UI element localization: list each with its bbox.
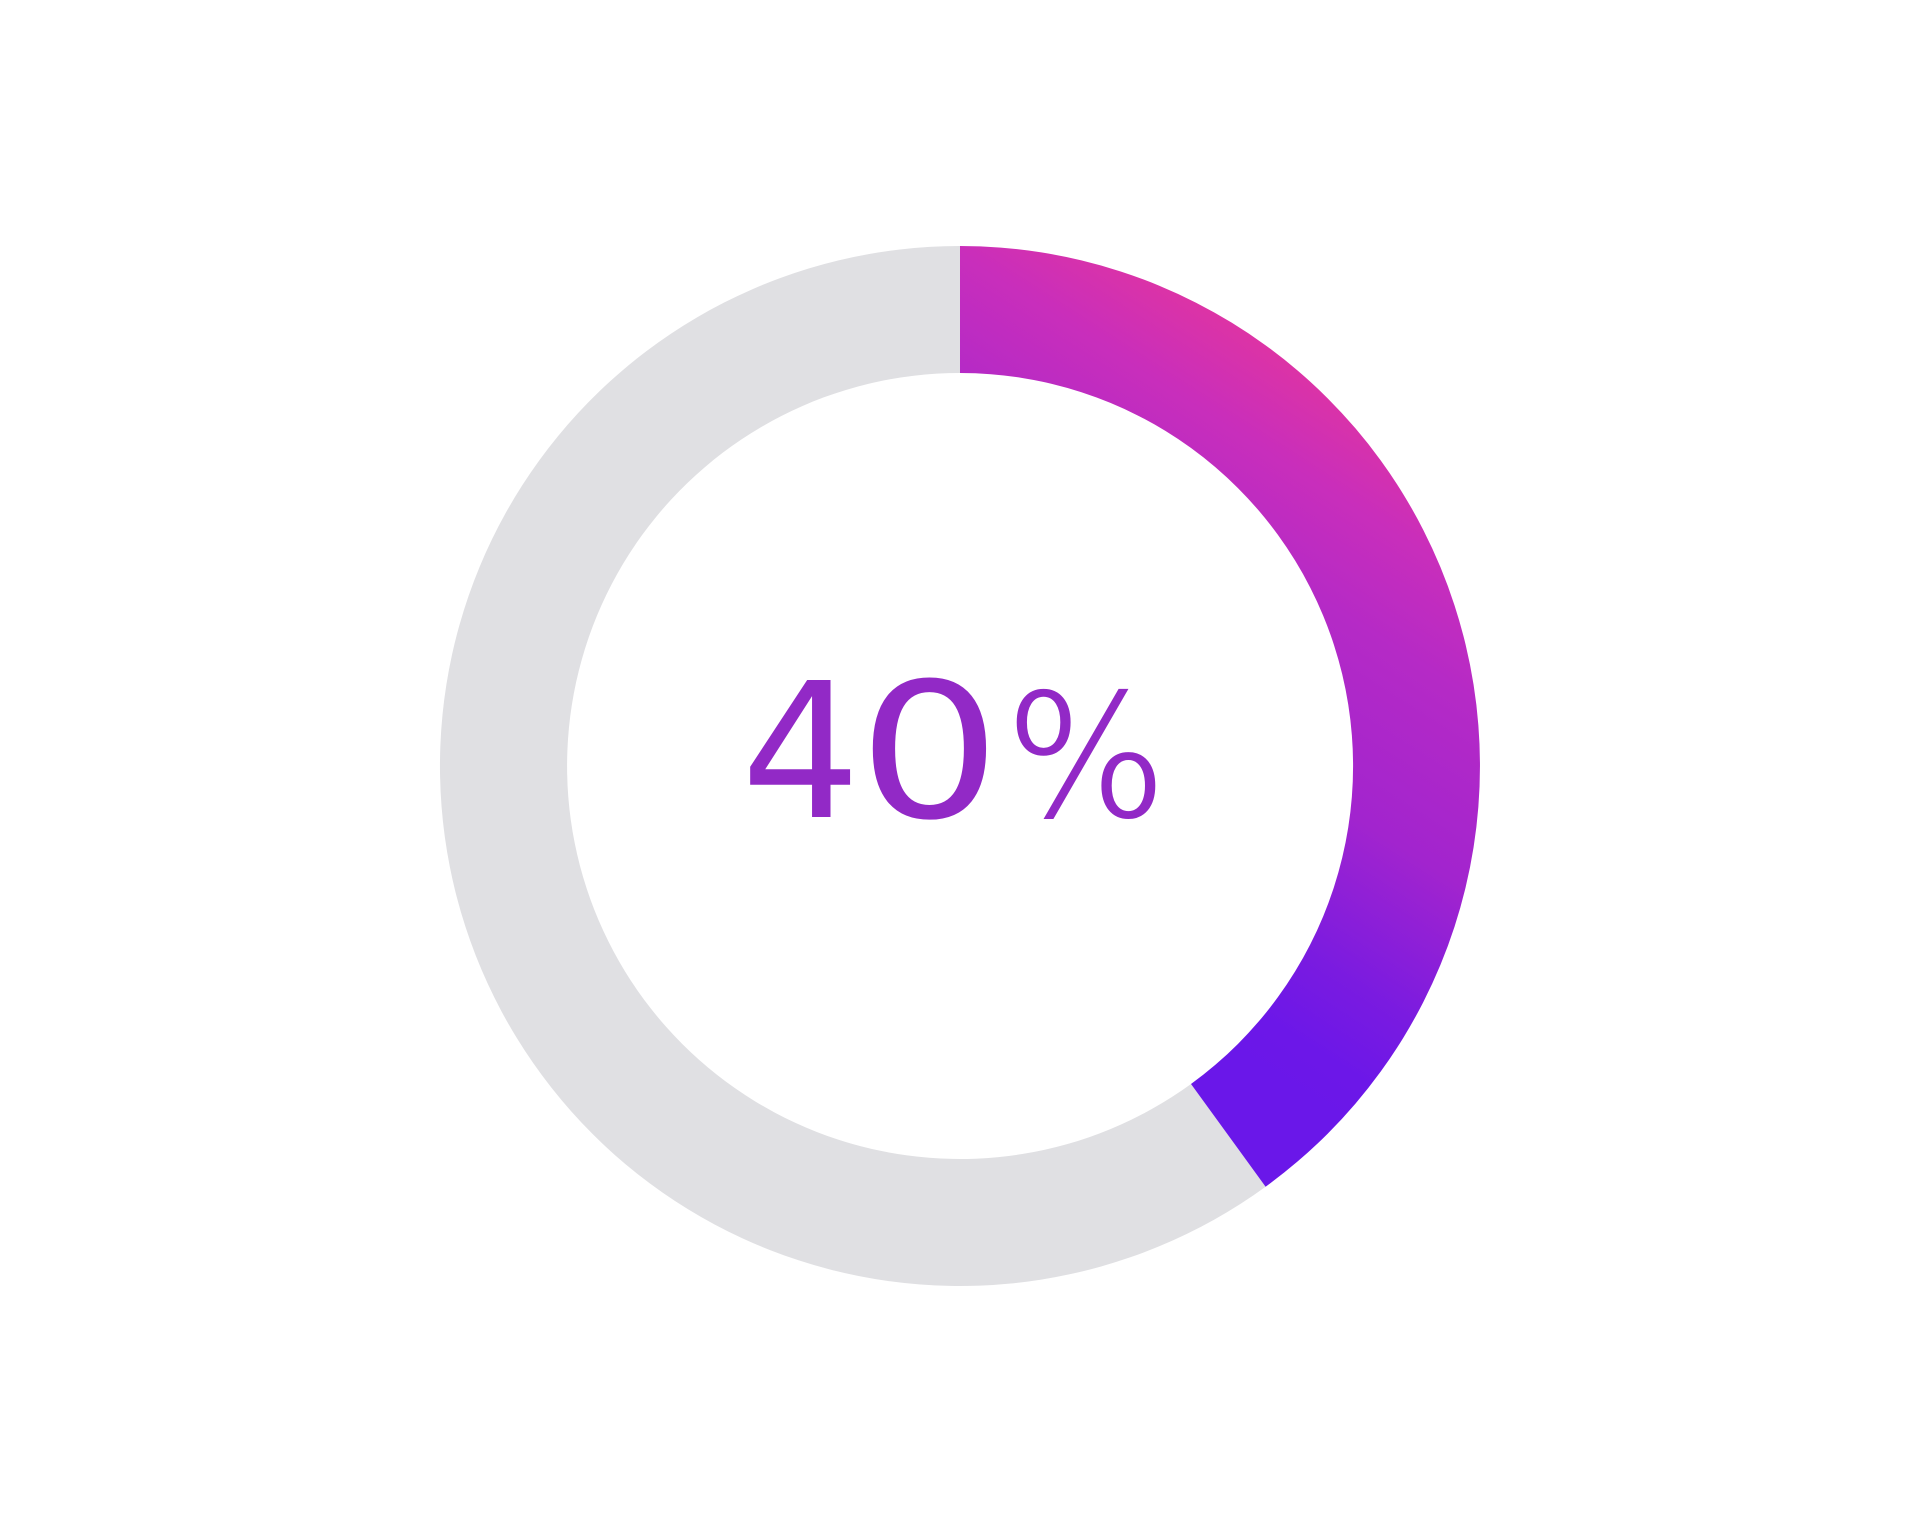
center label: 40%: 0 bbox=[858, 643, 1001, 862]
center label: 40%: % bbox=[1006, 655, 1166, 860]
donut value: gradient 40% arc bbox=[960, 246, 1480, 1187]
center label: 40%: 4 bbox=[741, 643, 861, 862]
center label: 40% bbox=[741, 643, 1166, 862]
donut remainder: grey 60% arc bbox=[440, 246, 1266, 1286]
